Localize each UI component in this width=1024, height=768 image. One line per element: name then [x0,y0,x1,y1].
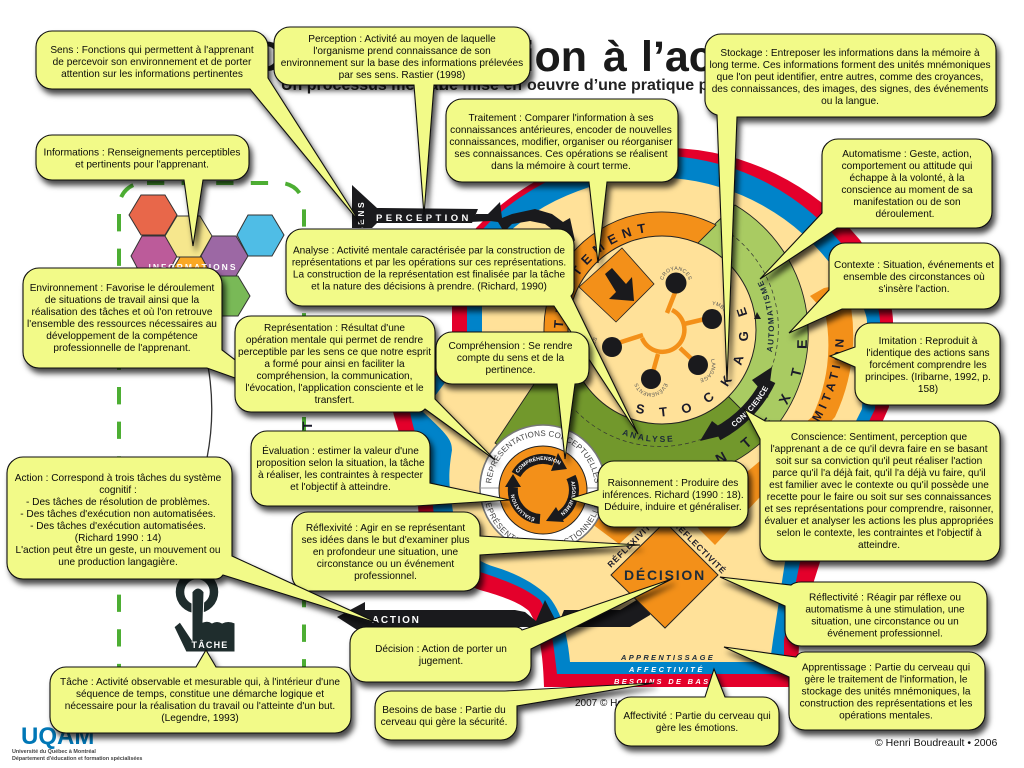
callout: analyse: et la nature des décisions à prendre. (Richard, 1990) [311,282,547,292]
logo: UQAM: UQAM [21,723,94,750]
callout: representation: transfert. [315,395,354,406]
imitation orange band [594,287,854,545]
callout: stockage: ou la langue. [821,96,879,107]
callout: representation: perceptible par les sens ce que notre esprit [238,347,431,358]
callout: reflexivite: en profondeur une situation, une [313,547,459,558]
callout: apprentissage: gère le traitement de l'information, le [805,674,968,686]
callout: stockage: Stockage : Entreposer les informations dans la mémoire à [720,48,980,59]
stockage disk [568,236,756,424]
callout: raisonnement [569,461,748,527]
callout: contexte: s'insère l'action. [878,284,950,295]
callout: representation [235,316,495,460]
callout: perception: environnement sur la base des informations prélevées [281,58,523,69]
callout: reflectivite: événement professionnel. [827,628,943,640]
callout: representation: a formé pour ainsi en faciliter la [264,359,405,370]
callout: reflectivite: automatisme à une stimulation, une [805,604,965,616]
callout: sens: attention sur les informations pertinentes [61,69,243,80]
contexte ring labels: CONTEXTE [715,340,807,460]
representation circle: REPRÉSENTATIONS FONCTIONNELLES [485,502,598,541]
stockage network: ÉVÉNEMENTS [634,383,668,397]
callout: conscience: est familier avec le contexte ou qu'il possède une [769,480,989,491]
callout: reflexivite: professionnel. [354,571,417,582]
representation circle: RAISONNEMENT [560,482,576,516]
callout: imitation: l'identique des actions sans [866,348,990,359]
callout: stockage: long terme. Ces informations forment des unités mnémoniques [709,60,991,71]
callout: conscience: et ses représentations pour comprendre, raisonner, [765,504,993,515]
callout: representation: Représentation : Résultat d'une [264,323,405,334]
callout: traitement [446,99,678,263]
brain level labels: AFFECTIVITÉ [628,665,705,674]
callout: conscience: l'apprenant a de ce qu'il devra faire en se basant [770,444,988,455]
logo: UQAM [12,723,142,762]
traitement orange ring [544,212,716,333]
stockage network: CROYANCES [660,266,692,280]
callout: imitation: Imitation : Reproduit à [879,336,977,347]
callout: decision: jugement. [418,656,463,667]
callout: environnement: professionnelle de l'apprenant. [53,343,191,354]
callout: perception: Perception : Activité au moyen de laquelle [308,34,496,45]
callout: besoins de base: cerveau qui gère la sécurité. [381,717,507,728]
logo: UQAM: Département d'éducation et formation spécialisées [12,756,142,762]
contexte ring labels [576,235,807,460]
arrow: perception: SENS [356,200,366,233]
callout: action: une production langagière. [58,557,178,568]
callout: reflexivite [292,512,640,591]
arrow: action [337,598,655,635]
subtitle: oeuvre d’une pratique professionnelle [527,77,817,94]
callout: evaluation: proposition selon la situation, la tâche [256,458,425,469]
title: l’action [641,33,792,81]
decision diamond: RÉFLECTIVITÉ [672,519,728,576]
callout: conscience: selon le contexte, les contraintes et l'objectif à [776,528,982,539]
callout: automatisme: manifestation ou de son [853,197,961,208]
callout: traitement: Traitement : Comparer l'information à ses [468,113,654,124]
main diagram: cream area [423,177,867,662]
callout: action: - Des tâches d'exécution automatisées. [30,521,206,532]
callout: sens: Sens : Fonctions qui permettent à l'apprenant [50,45,254,56]
callout: reflectivite: Réflectivité : Réagir par réflexe ou [809,592,961,604]
callout: affectivite: gère les émotions. [656,723,738,734]
title [252,33,792,81]
callout: action [7,457,380,624]
stockage network: SYMBOLES [712,301,724,312]
callout: perception [274,27,530,215]
callout: automatisme: comportement ou attitude qui [842,161,972,172]
contexte ring labels: AUTOMATISME [758,280,774,352]
arrow: conscience [700,367,776,441]
callout: representation: opération mentale qui permet de rendre [246,335,424,346]
callout: traitement: connaissances antérieures, encoder de nouvelles [450,125,672,136]
callout: conscience: parce qu'il l'a déjà fait, qu'il l'a déjà vu faire, qu'il [772,468,986,479]
callout: comprehension: compte du sens et de la [457,353,564,364]
arrow: action: ACTION [372,615,421,626]
representation circle: ÉVALUATION [510,494,535,522]
callout: raisonnement: Déduire, induire et généraliser. [604,502,742,513]
copyright: partly hidden: 2007 © Henri Boudreault [575,698,685,709]
callout: analyse: Analyse : Activité mentale caractérisée par la construction de [293,246,565,256]
callout: stockage: des connaissances, des images, des signes, des événements [712,84,988,95]
callout: conscience: atteindre. [858,540,900,551]
decision diamond: RÉFLEXIVITÉ [605,517,657,569]
callout: raisonnement: Raisonnement : Produire des [608,478,738,489]
representation circle [479,424,602,552]
stockage network: IMAGES [593,337,597,344]
callout: perception: par ses sens. Rastier (1998) [339,70,465,81]
arrow: perception [352,185,575,241]
callout: tache: nécessaire pour la réalisation du travail ou l'atteinte d'un but. [65,701,335,712]
brain level labels: BESOINS DE BASE [614,677,718,686]
callout: environnement: l'ensemble des ressources nécessaires au [27,319,217,330]
callout: perception: l'organisme prend connaissance de son [313,46,491,57]
title: à [603,33,628,81]
callout: contexte: ensemble des circonstances où [843,272,985,283]
stockage network [593,266,748,416]
green band: dark section [495,330,768,490]
logo: UQAM: Université du Québec à Montréal [12,749,96,755]
copyright: © Henri Boudreault • 2006 [875,737,997,749]
icon: tache hand: TÂCHE [192,639,228,650]
callout: besoins de base: Besoins de base : Partie du [382,705,506,716]
callout: automatisme: déroulement. [876,209,934,220]
callout: reflectivite [720,577,987,646]
green dashed environment frame [119,183,304,726]
callout: affectivite: Affectivité : Partie du cerveau qui [623,711,771,722]
stockage network: STOCKAGE [636,307,748,416]
callout: environnement [23,268,280,394]
callout: evaluation: et l'objectif à atteindre. [290,482,391,493]
callout: informations [36,135,249,246]
callout: analyse: La construction de la représentation est finalisée par la tâche [293,270,565,280]
callout: tache: (Legendre, 1993) [161,713,239,724]
representation circle: COMPRÉHENSION [516,456,561,472]
callout: environnement: réalisation des tâches et où l'on retrouve [32,307,213,318]
callout: action: (Richard 1990 : 14) [75,533,161,544]
callout: informations: et pertinents pour l'apprenant. [75,160,209,170]
callout: automatisme: échappe à la volonté, à la [849,173,965,184]
callout: imitation: principes. (Iribarne, 1992, p. [865,372,991,383]
green band: light section [662,205,808,436]
callout: reflexivite: Réflexivité : Agir en se représentant [306,523,465,534]
callout: comprehension: Compréhension : Se rendre [448,341,572,352]
callout: environnement: Environnement : Favorise le déroulement [30,283,214,294]
callout: imitation [830,323,1000,405]
callout: stockage [705,34,996,382]
callout: apprentissage [724,647,985,730]
callout: stockage: que l'on peut identifier, entre autres, comme des croyances, [717,72,983,83]
callout: automatisme [760,139,992,279]
callout: tache: séquence de temps, constitue une démarche logique et [76,689,324,700]
callout: informations: Informations : Renseignements perceptibles [44,148,240,158]
callout: reflexivite: ses idées dans le but d'examiner plus [301,535,470,546]
representation circle: REPRÉSENTATIONS CONCEPTUELLES [486,430,598,483]
callout: imitation: 158) [918,384,938,395]
subtitle: Un processus mental [281,77,443,94]
callout: conscience: recette pour le faire ou soit sur ses connaissances [767,492,991,503]
callout: action: Action : Correspond à trois tâches du système [15,473,221,484]
callout: action: - Des tâches d'exécution non automatisées. [20,509,216,520]
title: De la perception [252,33,587,81]
subtitle: de mise en [439,77,522,94]
brain level labels: APPRENTISSAGE [620,653,715,662]
callout: traitement: connaissances, modifier, organiser ou réorganiser [449,137,673,148]
decision diamond [605,517,728,628]
callout: decision: Décision : Action de porter un [375,644,507,655]
main diagram: blue band [410,156,880,674]
callout: analyse [286,229,638,434]
callout: apprentissage: construction des représentations et les [800,698,972,710]
callout: raisonnement: inférences. Richard (1990 : 18). [602,490,744,501]
callout: action: cognitif : [99,485,137,496]
subtitle [281,77,817,94]
callout: conscience: évaluer et analyser les actions les plus appropriées [765,516,993,527]
callout: besoins de base [375,683,654,740]
callout: conscience [744,409,1000,561]
callout: conscience: Conscience: Sentiment, perception que [791,432,967,443]
callout: sens [36,31,361,224]
callout: representation: l'évocation, l'application consciente et le [245,383,424,394]
rotated letter fragment: T [299,421,315,430]
contexte ring labels: ANALYSE [622,430,672,442]
brain level labels [614,653,718,686]
callout: evaluation [251,431,510,506]
callout: apprentissage: Apprentissage : Partie du cerveau qui [802,662,970,674]
callout: contexte [789,243,1000,333]
callout: automatisme: conscience au moment de sa [841,185,973,196]
callout: contexte: Contexte : Situation, événements et [834,260,994,271]
callout: environnement: développement de la compétence [46,331,198,342]
callout: apprentissage: stockage des unités mnémoniques, la [802,686,971,698]
icon: tache hand [174,575,235,652]
callout: environnement: de situations de travail ainsi que la [45,295,200,306]
hexagons: informations [129,195,284,316]
callout: representation: compréhension, la communication, [257,371,412,382]
callout: conscience: soit sur sa conviction qu'il peut réaliser l'action [776,456,982,467]
arrow: conscience: CONSCIENCE [732,386,768,426]
callout: comprehension: pertinence. [486,365,535,376]
callout: analyse: représentations et par les opérations sur ces représentations. [292,258,566,268]
arrow: perception: PERCEPTION [376,213,472,224]
callout: sens: de percevoir son environnement et de porter [53,57,252,68]
hexagons: informations: INFORMATIONS [148,262,238,272]
callout: comprehension [436,332,589,459]
thin arc: environment [207,366,212,458]
callout: evaluation: à réaliser, les contraintes à respecter [258,470,424,481]
callout: tache [50,650,351,733]
imitation orange band: IMITATION [812,339,844,420]
callout: reflexivite: circonstance ou un événement [317,559,454,570]
main diagram: red band [393,148,893,687]
callout: apprentissage: opérations mentales. [839,710,933,722]
callout: imitation: forcément comprendre les [869,360,987,371]
callout: action: L'action peut être un geste, un mouvement ou [15,545,221,556]
callout: traitement: ses connaissances. Ces opérations se réalisent [454,149,668,160]
callout: evaluation: Évaluation : estimer la valeur d'une [262,446,419,457]
callout: automatisme: Automatisme : Geste, action, [842,149,972,160]
traitement pointer with arrow: TRAITEMENT [554,224,645,328]
callout: affectivite [615,669,779,746]
stockage network: LANGAGE [700,358,716,382]
callout: decision [350,579,672,682]
decision diamond: DÉCISION [624,567,706,583]
callout: reflectivite: situation, une circonstance ou un [811,616,959,628]
callout: tache: Tâche : Activité observable et mesurable qui, à l'intérieur d'une [60,677,340,688]
callout: traitement: dans la mémoire à court terme. [491,161,631,172]
callout: action: - Des tâches de résolution de problèmes. [26,497,210,508]
